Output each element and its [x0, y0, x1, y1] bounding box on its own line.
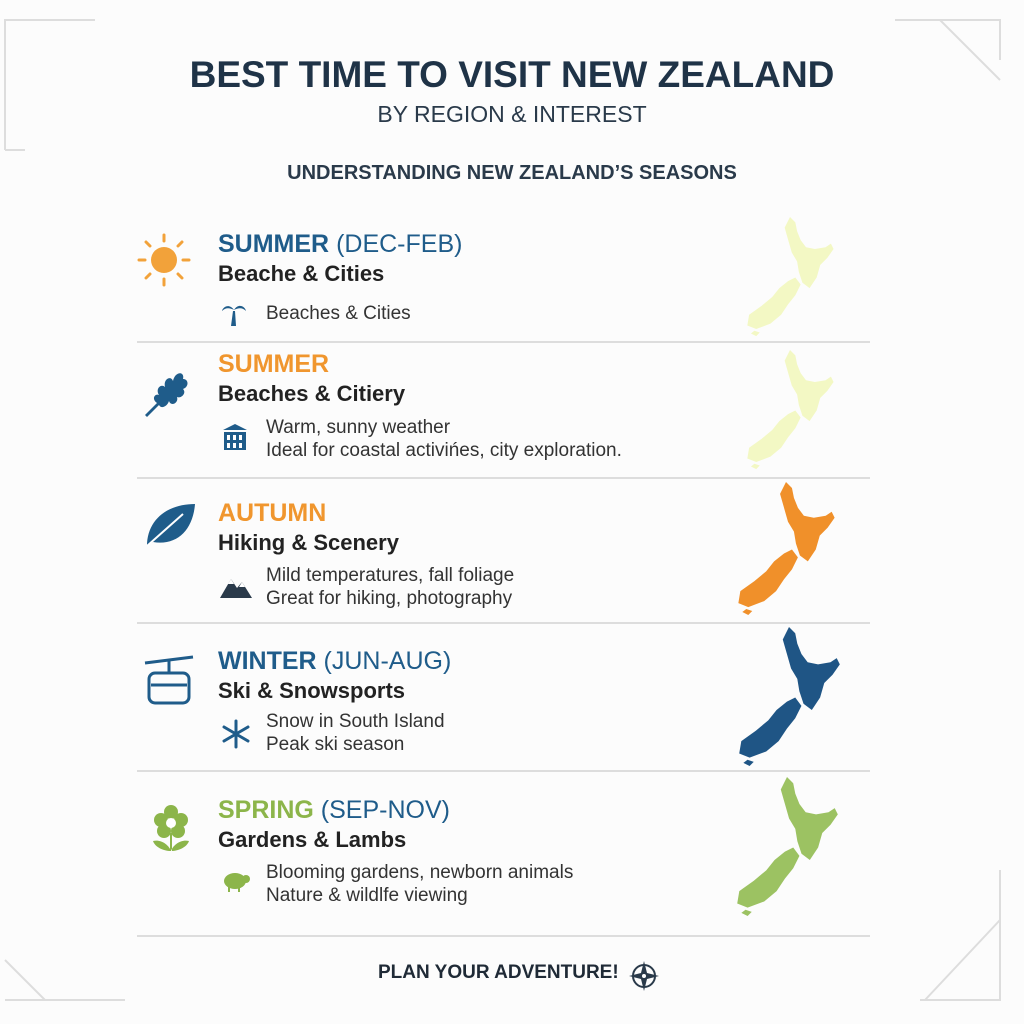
- panel: winter: Peak ski season: [266, 734, 404, 755]
- panel: winter: Snow in South Island: [266, 711, 445, 732]
- panel: autumn: [147, 482, 835, 615]
- panel: spring: Blooming gardens, newborn animals: [266, 862, 573, 883]
- panel: autumn: Hiking & Scenery: [218, 530, 399, 555]
- panel: summer: SUMMER: [218, 350, 329, 378]
- footer: PLAN YOUR ADVENTURE!: [378, 962, 619, 983]
- title: BEST TIME TO VISIT NEW ZEALAND: [190, 54, 834, 95]
- panel: spring: Gardens & Lambs: [218, 827, 406, 852]
- panel: spring: SPRING (SEP-NOV): [218, 796, 450, 824]
- icon: gondola: [144, 656, 194, 704]
- panel: summer dec-feb: [138, 217, 834, 336]
- panel: spring: [153, 777, 838, 916]
- icon: flower: [153, 805, 189, 851]
- icon: snowflake: [222, 720, 250, 748]
- panel: summer: Beaches & Citiery: [218, 381, 405, 406]
- panel: autumn: Mild temperatures, fall foliage: [266, 565, 514, 586]
- panel: winter: [144, 627, 840, 766]
- panel: summer: [145, 350, 834, 469]
- icon: sheep: [224, 873, 250, 892]
- icon: compass: [629, 961, 659, 991]
- panel: winter: WINTER (JUN-AUG): [218, 647, 451, 675]
- panel: autumn: AUTUMN: [218, 499, 326, 527]
- icon: sun: [138, 234, 190, 286]
- panel: autumn: Great for hiking, photography: [266, 588, 512, 609]
- section heading: UNDERSTANDING NEW ZEALAND’S SEASONS: [287, 162, 737, 184]
- icon: building: [223, 424, 247, 450]
- panel: spring: Nature & wildlfe viewing: [266, 885, 468, 906]
- map: [747, 217, 834, 336]
- panel: summer: Warm, sunny weather: [266, 417, 450, 438]
- panel: summer dec-feb: Beache & Cities: [218, 261, 384, 286]
- panel: summer dec-feb: Beaches & Cities: [266, 303, 411, 324]
- heading: SUMMER (DEC-FEB): [218, 230, 462, 258]
- panel: winter: Ski & Snowsports: [218, 678, 405, 703]
- icon: oak leaf: [145, 373, 188, 417]
- panel: summer: Ideal for coastal activińes, city exploration.: [266, 440, 622, 461]
- icon: mountains: [220, 579, 252, 598]
- subtitle: BY REGION & INTEREST: [377, 101, 647, 127]
- icon: palm: [222, 306, 246, 326]
- icon: leaf: [147, 504, 195, 545]
